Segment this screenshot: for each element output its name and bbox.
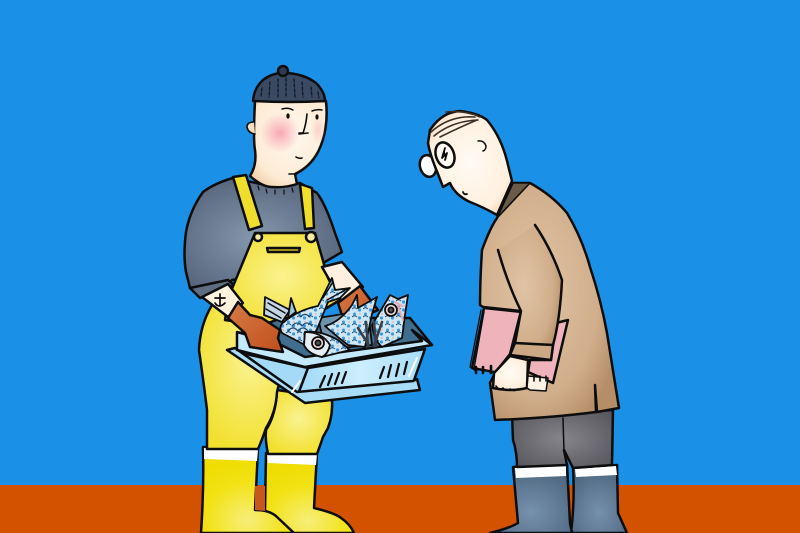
boot bands <box>515 466 617 478</box>
trousers <box>512 410 613 468</box>
bib of the overalls <box>225 233 340 330</box>
pupil: front <box>315 340 321 346</box>
fish eye: right <box>385 304 397 316</box>
figure: inspector <box>417 111 627 533</box>
book pages <box>470 310 484 371</box>
mouth <box>296 157 302 158</box>
forearm with tattoo <box>202 284 243 317</box>
far lens of glasses <box>417 153 439 179</box>
patch of ground seen between the boots <box>255 486 265 511</box>
sleeve <box>498 225 562 360</box>
eye <box>442 148 447 160</box>
fish: middle rear <box>318 310 372 348</box>
highlights <box>292 358 417 392</box>
left trouser leg and waders <box>199 290 300 449</box>
mouth <box>463 192 467 194</box>
tattoo: anchor <box>215 294 225 306</box>
ear <box>247 122 255 134</box>
basket interior <box>237 318 432 363</box>
pupil: right <box>388 307 394 313</box>
eyebrows <box>282 108 322 111</box>
left glove <box>228 302 283 352</box>
far cheek blush <box>311 116 325 144</box>
fish: far right upright <box>372 295 408 347</box>
fish: middle with fins <box>325 295 377 347</box>
fish: dark fins <box>358 322 382 346</box>
hair strands <box>431 112 480 137</box>
fish scales <box>288 314 312 331</box>
pink fish marks <box>395 302 403 320</box>
coat collar <box>497 183 530 218</box>
sleeve lines <box>498 225 562 345</box>
fish eye: front <box>312 337 324 349</box>
near lens of glasses <box>432 140 458 170</box>
fish: upper left with big tail <box>280 278 350 345</box>
ventilation slots <box>320 362 407 387</box>
buttons <box>254 232 316 242</box>
right strap <box>300 184 314 229</box>
basket bottom lip <box>227 348 420 403</box>
trouser centre line <box>563 418 564 452</box>
fish head: front <box>304 332 330 357</box>
sleeve cuff <box>190 280 234 298</box>
nose <box>299 114 308 134</box>
basket front face <box>297 349 425 397</box>
fingers <box>527 376 548 391</box>
sweater <box>184 178 342 288</box>
fish in basket <box>264 278 408 357</box>
right forearm <box>322 262 363 302</box>
bib pocket <box>267 248 300 252</box>
head <box>428 111 512 215</box>
sweater collar ribbing <box>258 186 293 194</box>
fish: small fin <box>288 298 296 318</box>
right trouser leg <box>266 390 332 454</box>
cuff <box>510 343 553 360</box>
coat <box>480 183 619 420</box>
ear <box>478 141 486 151</box>
book under the arm <box>470 308 530 373</box>
fish: front with large eye <box>304 332 350 357</box>
right boot <box>262 453 354 533</box>
fish stripes: back fins <box>266 303 285 318</box>
right boot <box>571 465 627 533</box>
left boot <box>490 464 572 533</box>
basket rim <box>237 330 432 367</box>
neck and head <box>250 101 327 187</box>
left boot <box>201 447 294 533</box>
fish: back fins <box>264 297 290 322</box>
cheek blush <box>260 113 300 153</box>
book edge past the sleeve <box>528 320 568 383</box>
hand holding book <box>493 356 528 390</box>
right glove <box>338 286 378 325</box>
basket left face <box>237 352 308 396</box>
basket <box>227 318 432 403</box>
knit hat <box>253 66 325 102</box>
figure: fisherman <box>184 66 432 533</box>
left strap <box>233 175 262 230</box>
chin line <box>289 173 297 175</box>
eyes <box>286 113 319 120</box>
ground strip <box>0 485 800 533</box>
fish tail stripes <box>323 282 347 300</box>
page marks <box>476 366 491 373</box>
knuckle marks <box>496 376 546 390</box>
